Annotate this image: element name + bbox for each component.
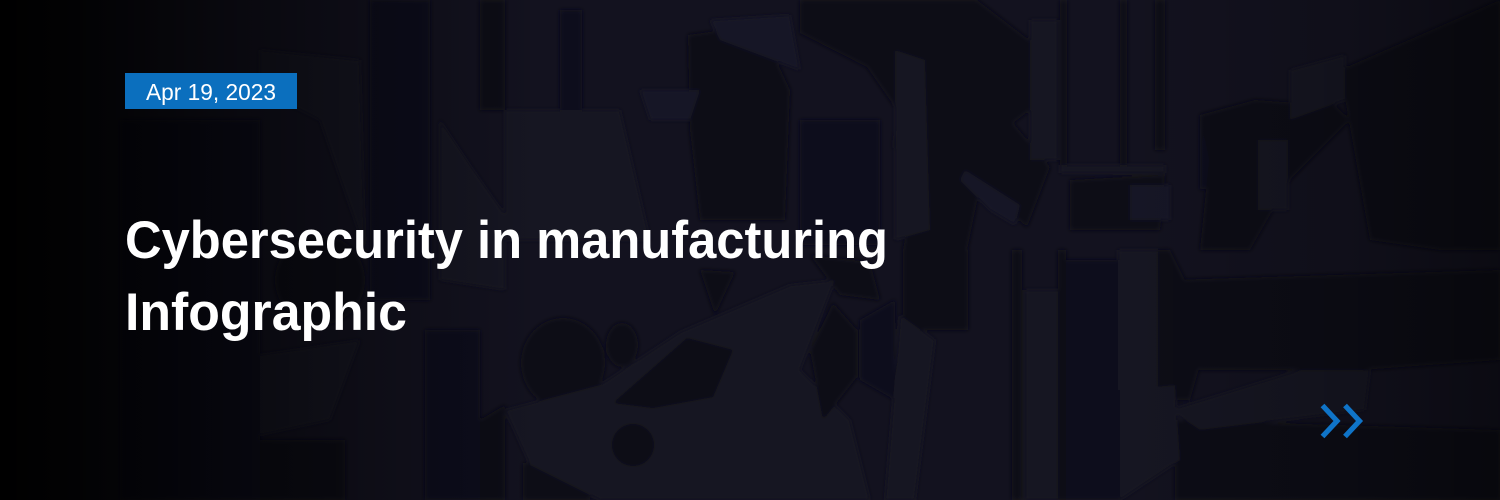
title: Infographic <box>125 283 407 342</box>
title: Cybersecurity in manufacturing <box>125 211 888 270</box>
date badge <box>125 73 297 109</box>
icon: double chevron arrow <box>1320 404 1363 438</box>
title <box>125 211 888 342</box>
date badge: Apr 19, 2023 <box>146 79 276 105</box>
